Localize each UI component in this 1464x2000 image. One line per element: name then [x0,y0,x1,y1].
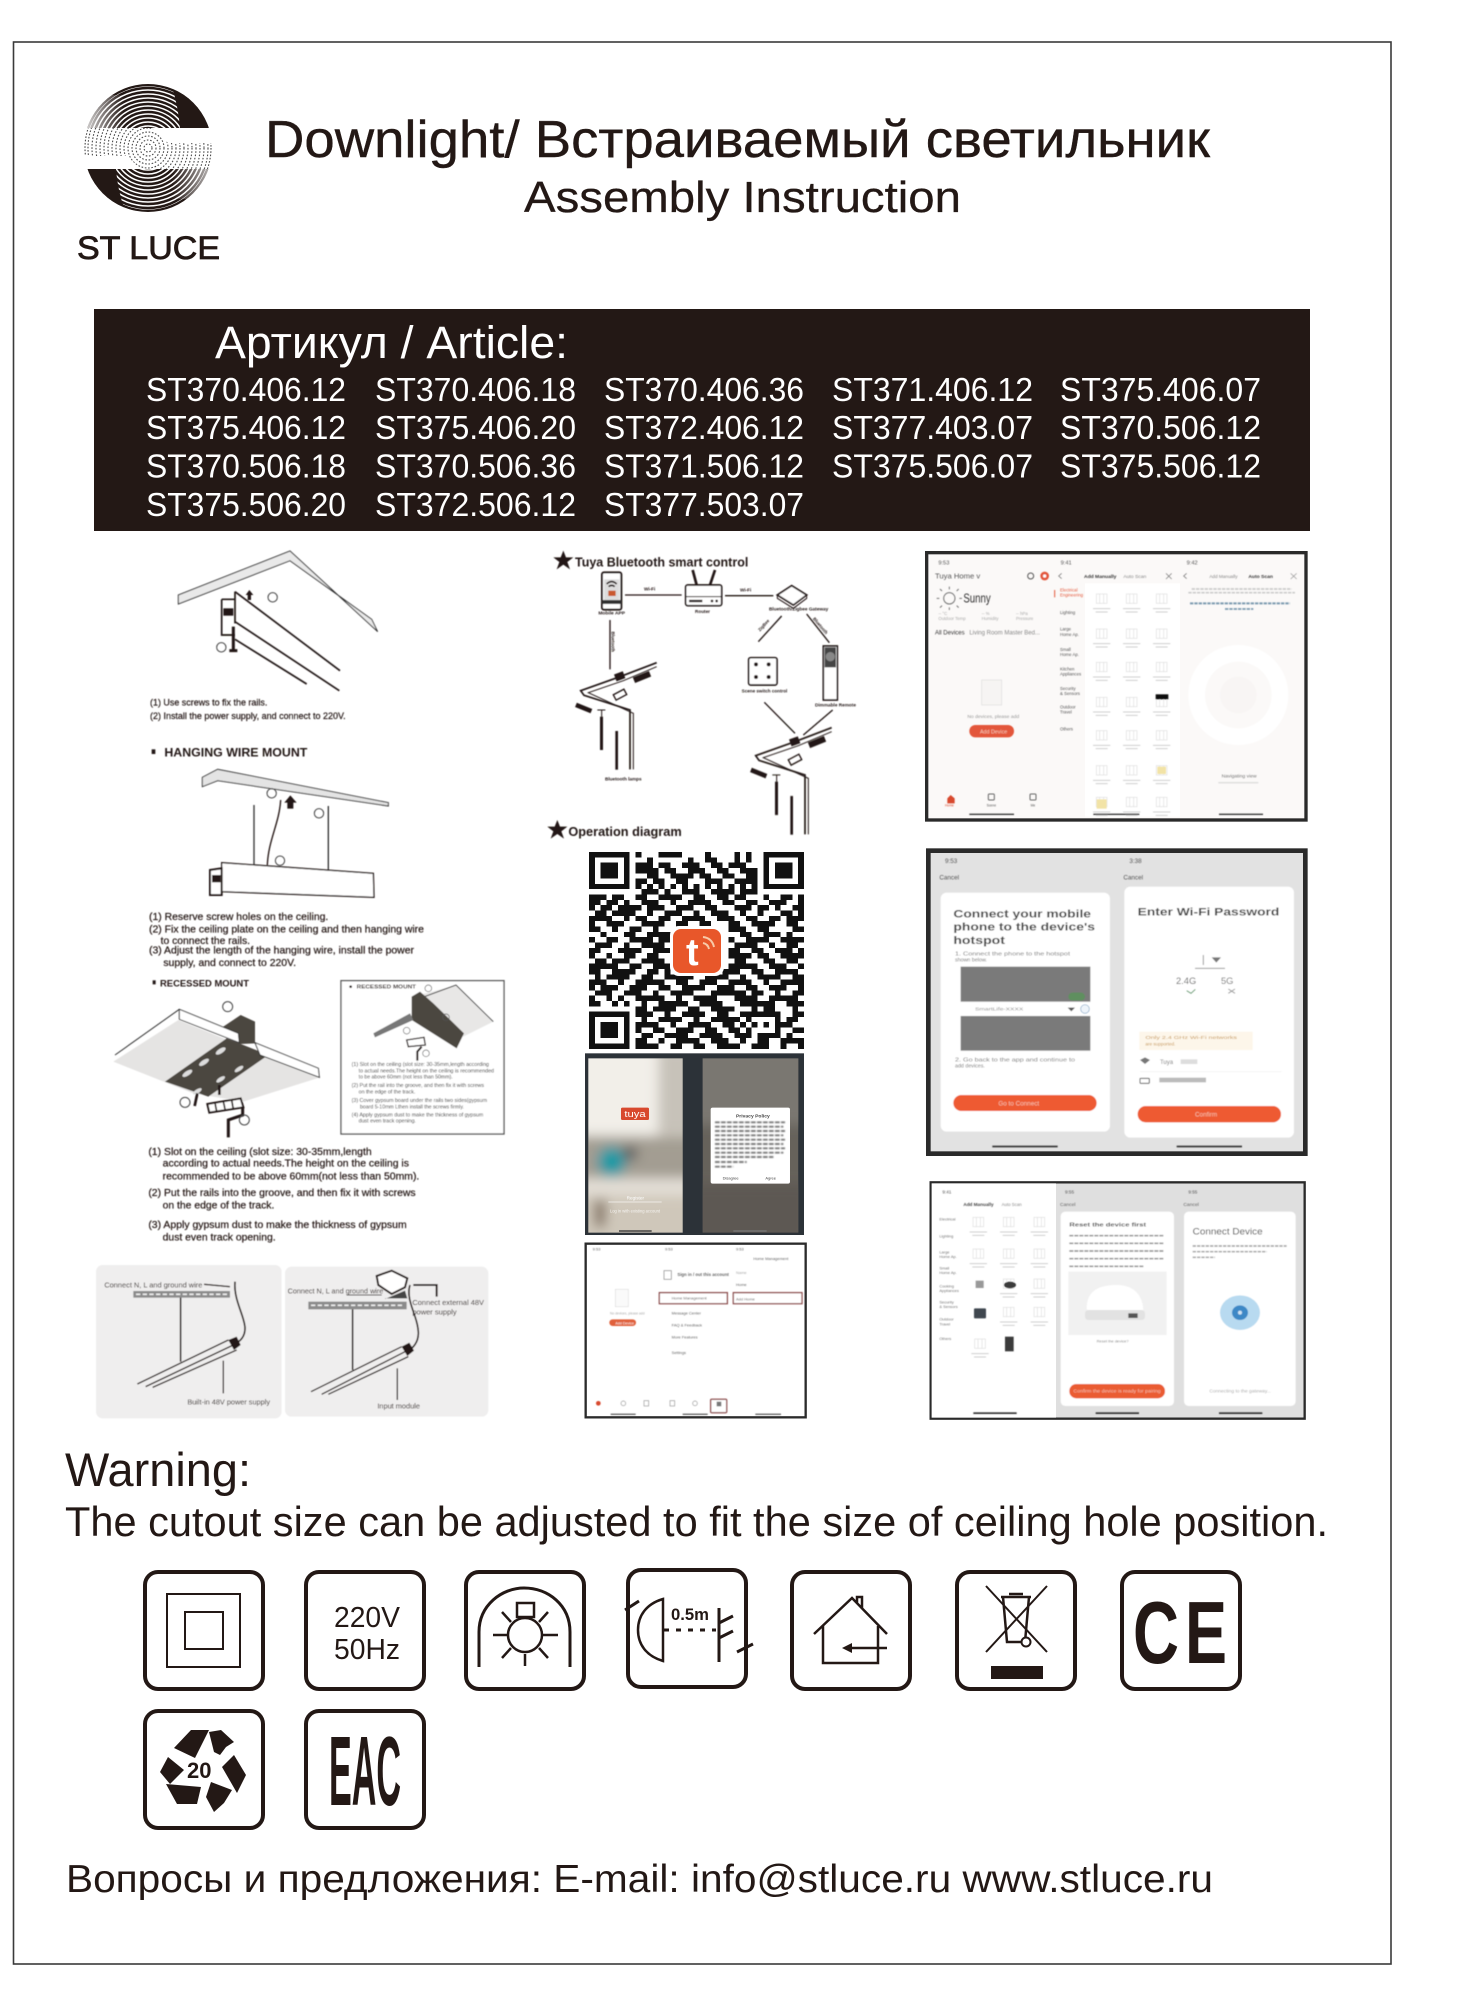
screen: home: Master Bed... [1004,631,1040,637]
screen content: Home [736,1282,747,1287]
screen: add manually: Add Manually [1084,574,1117,580]
icon: 220V 50Hz: 50Hz [334,1634,400,1666]
screen content [593,1247,802,1414]
screen: enter Wi-Fi password: 3:38 [1129,858,1142,865]
screen: add manually list: Cooking [939,1283,954,1288]
diagram: smart control network: Dimmable Remote [815,702,856,707]
icon: 220V 50Hz [306,1572,424,1689]
text: hanging wire steps: supply, and connect to 220V. [163,958,296,969]
screen: add manually: Home Ap. [1060,652,1079,657]
article codes: ST377.403.07 [832,409,1033,446]
screen: reset the device: Reset the device? [1097,1339,1129,1344]
logo: ST LUCE [77,80,220,266]
screen: add manually: Travel [1060,709,1072,714]
icon: recycling 20: 20 [187,1758,211,1783]
screen: add manually list: Large [939,1249,950,1254]
screen: enter Wi-Fi password: Confirm [1195,1111,1217,1118]
article codes: ST370.406.36 [604,371,804,408]
icon: lamp heat dome [466,1572,584,1689]
article codes: ST375.406.07 [1060,371,1261,408]
panel: app add device screens [927,553,1306,820]
screen: add manually list: Lighting [939,1233,953,1238]
screen content: No devices, please add [610,1311,645,1315]
screen content: 9:53 [736,1247,745,1252]
diagram: smart control network: Bluetooth [812,616,829,635]
text: recessed mount steps: (1) Slot on the ceiling (slot size: 30-35mm,length [148,1147,372,1158]
article codes: ST377.503.07 [604,486,804,523]
article codes: ST375.506.12 [1060,448,1261,484]
article codes: ST375.506.07 [832,448,1033,484]
screen: add manually [1055,561,1172,815]
screen: tuya welcome: tuya [624,1109,647,1119]
screen: add manually list [939,1189,1048,1414]
screen content: Message Center [672,1311,702,1316]
brand name: ST LUCE [77,230,220,266]
icon: indoor use only [792,1572,910,1689]
screen: add manually: 9:41 [1061,561,1072,567]
screen: auto scan: 9:42 [1187,561,1198,567]
screen content: Add Device [615,1321,634,1325]
panel: built-in power supply wiring: Built-in 48V power supply [187,1397,270,1406]
article codes: ST372.406.12 [604,409,804,446]
screen: add manually: Home Ap. [1060,632,1079,637]
panel: built-in power supply wiring [96,1265,282,1418]
text: surface mount steps: (2) Install the power supply, and connect to 220V. [150,711,346,721]
screen: home: Humidity [982,616,999,621]
icon: CE mark: E [1185,1583,1227,1682]
screen: home: Home [945,804,954,808]
text: hanging wire steps: (3) Adjust the length of the hanging wire, install the power [149,946,415,957]
screen: home: Outdoor Temp [938,616,966,621]
article codes: ST372.506.12 [375,486,576,523]
screen: home [935,561,1049,815]
article codes: ST375.406.12 [146,409,346,446]
screen: home: -- hPa [1016,611,1028,616]
screen: add manually: Lighting [1060,610,1076,615]
screen: home: Sunny [963,591,991,605]
screen: add manually list: Electrical [939,1217,956,1222]
icon: crossed out wheelie bin [957,1572,1075,1689]
diagram: smart control network: Bluetooth lamps [605,776,642,781]
text: hanging wire steps: (1) Reserve screw holes on the ceiling. [149,912,328,923]
diagram: smart control network: Scene switch control [742,688,787,693]
icon: recycling 20 [145,1711,263,1828]
screen: add manually: Small [1060,647,1071,652]
screen: enter Wi-Fi password [1123,858,1294,1147]
heading: operation diagram: Operation diagram [568,825,682,839]
panel: Tuya app login screens [577,1047,810,1245]
screen: connect device [1183,1189,1296,1414]
article codes: ST375.406.20 [375,409,576,446]
screen: tuya welcome: Register [627,1195,644,1200]
text: surface mount steps: (1) Use screws to fix the rails. [150,698,267,708]
screen: add manually: & Sensors [1060,691,1080,696]
text: inset steps: (2) Put the rail into the groove, and then fix it with screws [352,1083,484,1089]
article codes [146,371,1261,523]
article codes: ST371.506.12 [604,448,804,484]
QR code with Tuya logo [589,852,804,1049]
text: recessed mount steps: (2) Put the rails into the groove, and then fix it with screws [148,1188,416,1199]
text: recessed mount steps: on the edge of the track. [163,1200,274,1211]
screen content: 9:53 [593,1247,601,1252]
icon: Tuya logo: t [686,932,699,974]
screen: privacy policy: Disagree [723,1175,739,1180]
text: inset steps: board 5-10mm Lthen install the screws firmly. [360,1105,464,1111]
screen: home: All Devices [935,631,965,637]
screen: enter Wi-Fi password: Tuya [1160,1060,1174,1066]
screen: add manually: Others [1060,727,1073,732]
screen: add manually: Kitchen [1060,667,1075,672]
screen: connect device: 9:55 [1188,1189,1198,1194]
diagram: smart control network: Wi-Fi [644,587,655,592]
text: recessed mount steps: recommended to be above 60mm(not less than 50mm). [163,1171,419,1182]
screen: add manually: Electrical [1060,588,1078,593]
screen: home: 9:53 [938,561,949,567]
screen: home: -- % [982,611,990,616]
screen: connect to hotspot: 1. Connect the phone to the hotspot [955,951,1071,957]
panel: recessed mount inset: RECESSED MOUNT [357,985,417,991]
diagram: smart control network: ZigBee [757,618,771,632]
panel: Tuya Bluetooth smart control [547,551,856,839]
screen: add manually list: Security [939,1299,954,1304]
diagram: smart control network: Router [695,609,710,614]
panel: external power supply wiring [285,1267,488,1417]
screen: enter Wi-Fi password: 2.4G [1176,976,1196,986]
panel: recessed mount [96,981,504,1418]
article heading: Артикул / Article: [215,317,568,368]
screen: add manually: Appliances [1060,672,1081,677]
panel: recessed mount inset [341,981,504,1134]
screen: add manually list: Small [939,1265,949,1270]
panel: external power supply wiring: power supply [412,1308,457,1317]
screen: add manually list: Home Ap. [939,1254,957,1259]
diagram: surface mount rail [178,551,378,691]
screen content: Name [736,1270,747,1275]
text: hanging wire steps: (2) Fix the ceiling plate on the ceiling and then hanging wire [149,924,424,935]
heading: Tuya Bluetooth smart control: Tuya Bluetooth smart control [575,555,748,570]
screen: enter Wi-Fi password: Enter Wi-Fi Password [1138,906,1279,918]
diagram: smart control network: Bluetooth [611,632,616,652]
screen: connect device: Connecting to the gateway... [1209,1389,1271,1394]
text: surface mount steps [150,698,346,721]
screen content: Settings [672,1350,686,1355]
article codes: ST370.506.36 [375,448,576,484]
screen: connect device: Connect Device [1193,1226,1263,1236]
screen: connect to hotspot: phone to the device's [953,922,1095,934]
screen content: Home Management [672,1296,708,1301]
icon: Tuya logo [670,926,724,976]
screen: home: No devices, please add [967,714,1019,720]
text: recessed mount steps: dust even track opening. [163,1233,276,1244]
screen: connect to hotspot [939,858,1110,1147]
screen: tuya welcome: Log in with existing account [610,1208,661,1213]
screen: auto scan [1184,561,1297,815]
panel: article list [94,309,1310,531]
screen: connect to hotspot: shown below. [955,957,987,963]
text: recessed mount steps: (3) Apply gypsum dust to make the thickness of gypsum [148,1220,407,1231]
screen: connect to hotspot: hotspot [953,935,1006,947]
text: inset steps: on the edge of the track. [359,1089,415,1095]
text: EAC [329,1716,401,1826]
screen: enter Wi-Fi password: are supported. [1145,1042,1175,1047]
screen: auto scan: Auto Scan [1248,574,1273,580]
icon: concentric ring S mark [84,84,212,212]
screen: add manually: Outdoor [1060,704,1076,709]
screen: home: -- °C [938,611,947,616]
article codes: ST370.406.12 [146,371,346,408]
screen: tuya welcome [577,1047,697,1245]
screen: privacy policy [690,1047,810,1243]
screen: home: Tuya Home v [935,572,980,581]
screen content: More Features [672,1334,698,1339]
screen content: 9:53 [665,1247,674,1252]
screen content: Sign in / out this account [677,1272,729,1277]
screen: home: Scene [987,804,996,808]
screen: enter Wi-Fi password: 5G [1221,976,1233,986]
screen: connect to hotspot: SmartLife-XXXX [975,1007,1025,1012]
screen: add manually list: Others [939,1336,951,1341]
text: inset steps: to be above 60mm (not less than 50mm). [359,1075,453,1081]
article codes: ST371.406.12 [832,371,1033,408]
text: inset steps: to actual needs.The height on the ceiling is recommended [359,1068,494,1074]
panel: Tuya app me and language screens [586,1244,806,1417]
panel: connect hotspot and Wi-Fi password screens [928,851,1305,1154]
panel: built-in power supply wiring: Connect N, L and ground wire [104,1280,202,1289]
screen: connect device: Cancel [1183,1202,1199,1208]
article codes: ST370.506.18 [146,448,346,484]
icon: CE mark: C [1133,1583,1179,1682]
contact line: Вопросы и предложения: E-mail: info@stluce.ru www.stluce.ru [66,1858,1213,1901]
screen: reset the device [1060,1189,1174,1414]
text: inset steps: (4) Apply gypsum dust to make the thickness of gypsum [352,1112,483,1118]
icon: EAC mark [306,1711,424,1828]
screen: add manually: Security [1060,686,1076,691]
text: recessed mount steps: according to actual needs.The height on the ceiling is [163,1159,409,1170]
panel: external power supply wiring: Connect N, L and ground wire [288,1286,383,1295]
screen: add manually list: Home Ap. [939,1270,957,1275]
screen content: FAQ & Feedback [672,1323,702,1328]
text: inset steps: dust even track opening. [359,1119,416,1125]
screen content: Home Management [753,1256,789,1261]
screen: add manually list: Add Manually [963,1202,994,1207]
warning text: The cutout size can be adjusted to fit the size of ceiling hole position. [65,1498,1328,1545]
heading: hanging wire mount: HANGING WIRE MOUNT [164,747,307,760]
diagram: recessed mount [113,1002,320,1137]
title: Downlight/ Встраиваемый светильник [265,111,1210,169]
heading: Tuya Bluetooth smart control [553,551,748,570]
screen: connect to hotspot: 2. Go back to the app and continue to [955,1058,1075,1064]
screen: add manually list: Travel [939,1321,950,1326]
icon: 220V 50Hz: 220V [334,1602,401,1634]
screen: privacy policy: Agree [765,1175,777,1180]
screen: reset the device: Confirm the device is ready for pairing [1073,1389,1161,1394]
screen: connect to hotspot: add devices. [955,1064,985,1070]
screen: connect to hotspot: Go to Connect [998,1101,1039,1108]
screen: auto scan: Navigating view [1222,774,1257,780]
icon: minimum distance 0.5m [625,1570,753,1687]
heading: operation diagram [547,820,682,839]
screen: home: Pressure [1016,616,1034,621]
screen: home: Me [1031,804,1035,808]
screen: add manually list: 9:41 [942,1189,952,1194]
screen: add manually list: & Sensors [939,1304,958,1309]
screen: add manually list: Outdoor [939,1317,954,1322]
screen: add manually list: Appliances [939,1288,959,1293]
icon: minimum distance 0.5m: 0.5m [671,1605,709,1624]
screen: add manually: Large [1060,627,1072,632]
screen: auto scan: Add Manually [1209,574,1238,579]
screen: connect to hotspot: Cancel [939,874,959,881]
diagram: smart control network [575,570,856,835]
text: inset steps: (3) Cover gypsum board under the rails two sides(gypsum [352,1098,487,1104]
screen: connect to hotspot: 9:53 [945,858,958,865]
screen: add manually: Auto Scan [1123,574,1147,580]
panel: external power supply wiring: Connect external 48V [412,1298,485,1307]
screen: home: Living Room [969,631,1003,637]
QR modules [589,852,804,1049]
screen: home: Add Device [980,729,1007,735]
text: hanging wire steps [149,912,424,969]
diagram: smart control network: Wi-Fi [740,588,751,593]
screen: reset the device: Cancel [1060,1202,1076,1208]
screen: connect to hotspot: Connect your mobile [953,909,1091,921]
screen content: Add Home [736,1297,756,1302]
diagram: hanging wire mount [202,769,388,897]
diagram: smart control network: Bluetooth/Zigbee Gateway [769,606,829,611]
panel: external power supply wiring: Input module [377,1401,420,1410]
icon: double insulation class II [145,1572,263,1689]
warning heading: Warning: [65,1443,251,1496]
article codes: ST370.406.18 [375,371,576,408]
panel: gateway connect screens [931,1182,1305,1419]
text: inset steps [352,1062,494,1125]
screen: privacy policy: Privacy Policy [736,1113,770,1119]
article codes: ST370.506.12 [1060,409,1261,446]
article codes: ST375.506.20 [146,486,346,523]
screen: reset the device: 9:55 [1065,1189,1074,1194]
screen: add manually: Engineering [1060,593,1084,598]
screen: add manually list: Auto Scan [1002,1202,1022,1207]
diagram: smart control network: Mobile APP [598,611,625,616]
heading: recessed mount: RECESSED MOUNT [160,978,249,988]
text: inset steps: (1) Slot on the ceiling (slot size: 30-35mm,length according [352,1062,489,1068]
panel: rail and hanging wire mounting [149,551,424,988]
icon: CE mark [1122,1572,1240,1689]
text: hanging wire steps: to connect the rails. [161,936,250,947]
screen: enter Wi-Fi password: Only 2.4 GHz Wi-Fi networks [1145,1035,1238,1040]
screen: enter Wi-Fi password: Cancel [1123,874,1143,881]
text: recessed mount steps [148,1147,419,1244]
subtitle: Assembly Instruction [524,173,961,222]
screen: reset the device: Reset the device first [1069,1223,1146,1229]
